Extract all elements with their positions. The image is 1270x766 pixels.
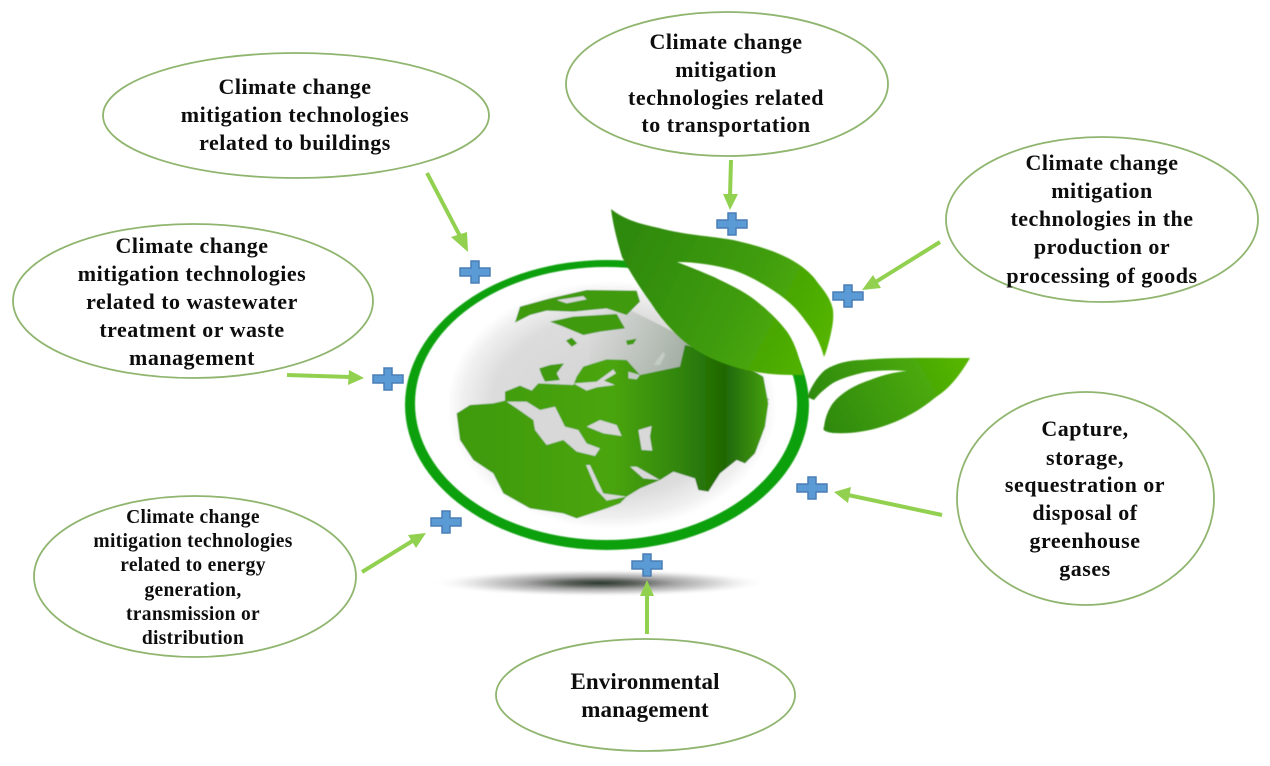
- panel: wastewater ellipse: management: [129, 345, 255, 370]
- icon: ring around globe: [405, 260, 809, 550]
- arrow: transportation to globe: [723, 160, 738, 210]
- arrow: capture to globe: [834, 487, 942, 515]
- icon: plus near capture: [797, 477, 827, 499]
- panel: environmental management ellipse: [496, 639, 795, 751]
- panel: buildings ellipse: mitigation technologies: [181, 102, 409, 127]
- panel: transportation ellipse: technologies related: [628, 85, 824, 110]
- panel: energy ellipse: related to energy: [120, 555, 266, 576]
- panel: production of goods ellipse: technologies in the: [1010, 206, 1194, 231]
- arrow: buildings to globe: [427, 173, 468, 252]
- panel: environmental management ellipse: management: [581, 697, 709, 722]
- panel: capture and storage ellipse: storage,: [1046, 445, 1124, 470]
- panel: buildings ellipse: related to buildings: [199, 130, 391, 155]
- panel: transportation ellipse: mitigation: [675, 57, 777, 82]
- ground shadow: [430, 569, 770, 597]
- panel: wastewater ellipse: Climate change: [115, 233, 269, 258]
- icon: plus near buildings: [460, 261, 490, 283]
- icon: small leaf with stem: [807, 358, 970, 433]
- icon: large leaf: [611, 209, 833, 375]
- panel: transportation ellipse: Climate change: [649, 29, 803, 54]
- panel: transportation ellipse: to transportation: [641, 112, 811, 137]
- panel: environmental management ellipse: Environmental: [570, 669, 720, 694]
- panel: buildings ellipse: [103, 53, 489, 178]
- icon: plus near goods: [833, 285, 863, 307]
- panel: wastewater ellipse: [13, 224, 373, 378]
- icon: plus near transportation: [717, 213, 747, 235]
- arrow: environmental management to globe: [640, 580, 654, 634]
- panel: wastewater ellipse: related to wastewater: [86, 289, 298, 314]
- panel: capture and storage ellipse: gases: [1059, 556, 1111, 581]
- arrow: energy to globe: [362, 533, 426, 572]
- panel: production of goods ellipse: processing of goods: [1006, 263, 1198, 288]
- arrow: goods to globe: [862, 242, 940, 290]
- panel: energy ellipse: generation,: [144, 580, 242, 601]
- icon: plus near environmental management: [632, 554, 662, 576]
- panel: energy ellipse: transmission or: [126, 604, 260, 625]
- panel: capture and storage ellipse: disposal of: [1032, 500, 1138, 525]
- panel: energy ellipse: [34, 496, 356, 657]
- icon: plus near wastewater: [373, 368, 403, 390]
- panel: capture and storage ellipse: [957, 392, 1214, 605]
- panel: production of goods ellipse: mitigation: [1051, 178, 1153, 203]
- panel: energy ellipse: distribution: [142, 628, 244, 649]
- panel: capture and storage ellipse: greenhouse: [1030, 528, 1140, 553]
- panel: transportation ellipse: [566, 12, 888, 156]
- panel: energy ellipse: Climate change: [126, 507, 260, 528]
- arrow: wastewater to globe: [287, 370, 364, 385]
- panel: production of goods ellipse: Climate change: [1025, 150, 1179, 175]
- panel: capture and storage ellipse: Capture,: [1041, 416, 1129, 441]
- panel: wastewater ellipse: mitigation technologies: [78, 261, 306, 286]
- panel: production of goods ellipse: production or: [1034, 234, 1170, 259]
- panel: wastewater ellipse: treatment or waste: [99, 317, 285, 342]
- panel: capture and storage ellipse: sequestration or: [1005, 472, 1165, 497]
- panel: energy ellipse: mitigation technologies: [93, 531, 293, 552]
- panel: production of goods ellipse: [946, 137, 1258, 302]
- icon: globe: [447, 281, 777, 529]
- panel: buildings ellipse: Climate change: [218, 74, 372, 99]
- icon: plus near energy: [431, 511, 461, 533]
